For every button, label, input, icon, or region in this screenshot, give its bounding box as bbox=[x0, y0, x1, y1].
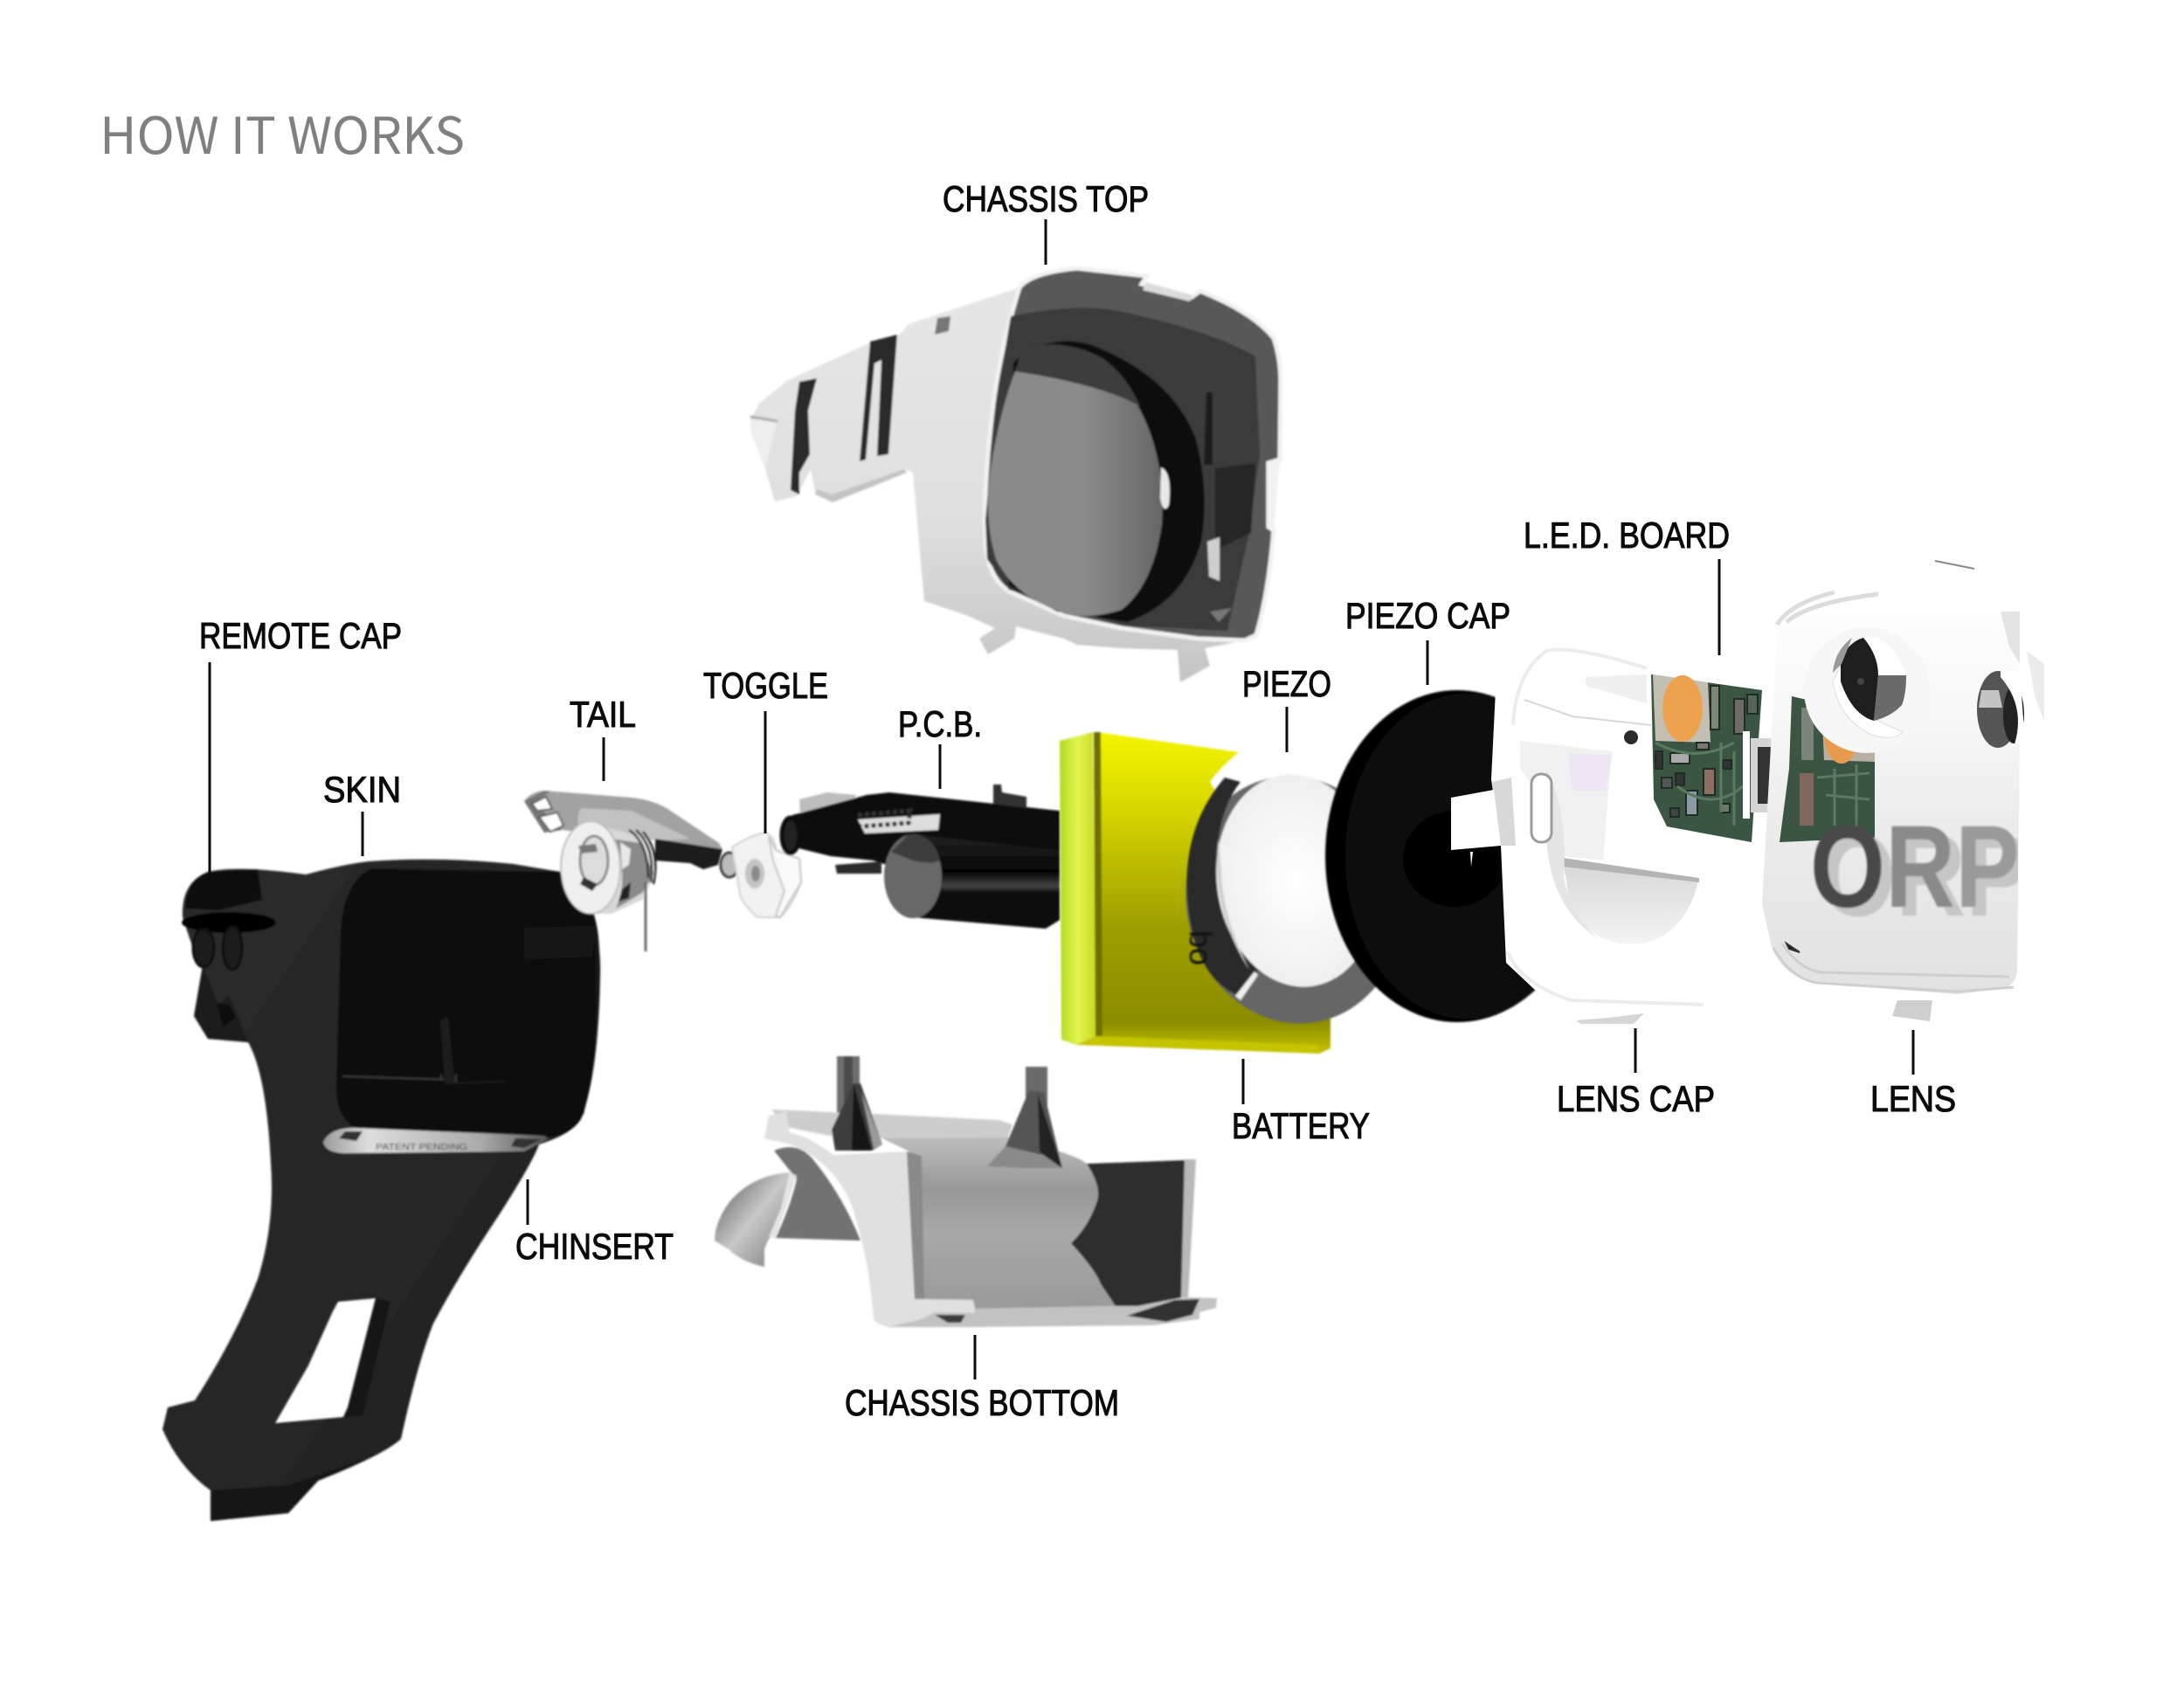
label: lens bbox=[1870, 1030, 1956, 1119]
part: toggle bbox=[721, 833, 801, 917]
cones bbox=[832, 1083, 1062, 1168]
posts bbox=[837, 1056, 1047, 1144]
part: lens bbox=[1762, 561, 2044, 1021]
label: skin bbox=[323, 769, 401, 856]
skin window bbox=[336, 868, 599, 1137]
label: skin: SKIN bbox=[323, 769, 401, 810]
label: tail bbox=[570, 694, 636, 781]
part: lens cap bbox=[1451, 649, 1742, 1024]
second board section bbox=[1780, 696, 1875, 842]
part: battery bbox=[1060, 732, 1330, 1054]
label: chinsert: CHINSERT bbox=[515, 1226, 674, 1267]
part: l.e.d. board bbox=[1651, 674, 1782, 842]
lens eye left bbox=[1804, 627, 1930, 753]
white tab bbox=[1451, 790, 1501, 850]
logo: ORP bbox=[1810, 802, 2020, 932]
battery print: bo bbox=[1183, 930, 1219, 965]
title: HOW IT WORKS bbox=[100, 95, 465, 169]
tail spring bbox=[629, 830, 655, 951]
label: lens cap: LENS CAP bbox=[1557, 1078, 1715, 1119]
part: p.c.b. bbox=[782, 785, 1060, 929]
label: piezo cap: PIEZO CAP bbox=[1345, 595, 1510, 636]
hood bbox=[774, 1147, 860, 1241]
lens eye right bbox=[1977, 671, 2025, 748]
scoop bbox=[715, 1172, 797, 1267]
label: p.c.b. bbox=[898, 703, 982, 789]
label: toggle: TOGGLE bbox=[703, 665, 828, 706]
logo: ORP bbox=[1821, 811, 2030, 941]
chinsert: PATENT PENDING bbox=[376, 1143, 467, 1152]
interior bbox=[985, 268, 1281, 640]
label: chassis top: CHASSIS TOP bbox=[943, 178, 1149, 219]
part: tail bbox=[524, 791, 722, 951]
label: piezo bbox=[1242, 663, 1331, 752]
part: chassis top bbox=[750, 268, 1281, 682]
label: battery: BATTERY bbox=[1232, 1105, 1370, 1146]
slots bbox=[791, 316, 950, 494]
logo bbox=[1813, 825, 2018, 917]
label: p.c.b.: P.C.B. bbox=[898, 703, 982, 744]
label: tail: TAIL bbox=[570, 694, 636, 735]
label: lens: LENS bbox=[1870, 1078, 1956, 1119]
dark wall bbox=[1071, 1160, 1185, 1306]
label: l.e.d. board: L.E.D. BOARD bbox=[1524, 515, 1730, 556]
label: piezo: PIEZO bbox=[1242, 663, 1331, 704]
chinsert bbox=[323, 1128, 549, 1153]
connector bbox=[858, 811, 940, 833]
board components bbox=[1655, 686, 1758, 817]
front face bbox=[764, 1111, 975, 1327]
label: chassis bottom: CHASSIS BOTTOM bbox=[845, 1382, 1119, 1423]
capacitor bbox=[884, 834, 1060, 929]
tail barrel bbox=[561, 821, 655, 914]
slot bbox=[1531, 774, 1552, 842]
remote cap bbox=[182, 869, 276, 1027]
flex connector bbox=[1743, 731, 1782, 819]
part: chassis bottom bbox=[715, 1056, 1217, 1327]
part: skin bbox=[162, 860, 600, 1521]
part: piezo ring and disc bbox=[1166, 759, 1423, 1041]
floor bbox=[882, 1137, 1116, 1309]
lens cap dome bbox=[1564, 865, 1699, 944]
part: piezo cap bbox=[1325, 690, 1589, 1022]
switch bbox=[993, 785, 1026, 808]
label: remote cap: REMOTE CAP bbox=[199, 615, 402, 656]
exploded diagram bbox=[105, 115, 2044, 1523]
